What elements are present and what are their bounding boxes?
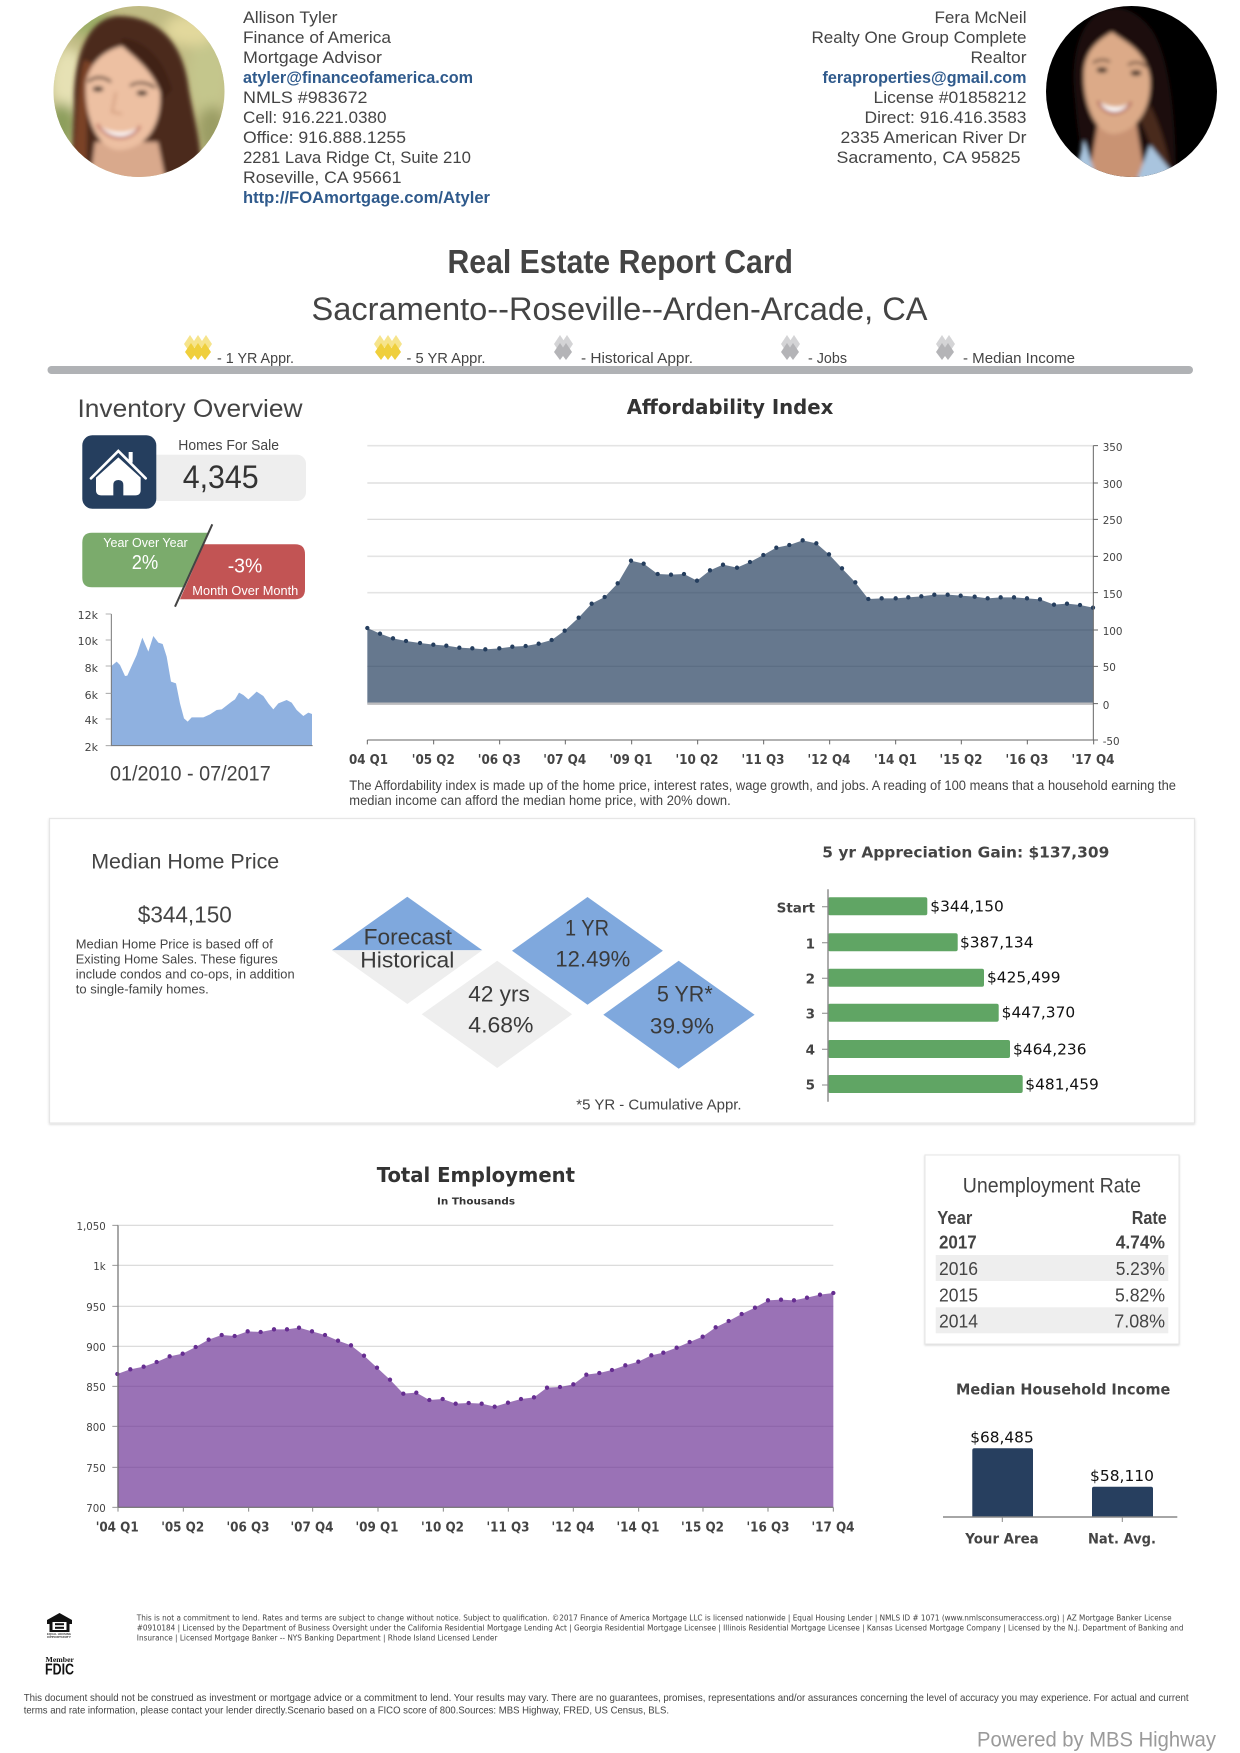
- x axis labels: '12 Q4: [552, 1521, 594, 1536]
- badge: month over month: -3%: [228, 556, 262, 578]
- panel: change badges: [82, 524, 305, 607]
- subtitle: metro area: Sacramento--Roseville--Arden-Arcade, CA: [312, 291, 928, 327]
- icon: member FDIC: [45, 1656, 74, 1678]
- badge: year over year: Year Over Year: [103, 535, 188, 550]
- contact block: Allison Tyler: Finance of America: [243, 28, 392, 47]
- chart: appreciation bars: Start: [777, 901, 816, 917]
- contact block: Fera McNeil: Direct: 916.416.3583: [864, 108, 1026, 127]
- diamond: 5 YR: 5 YR*: [657, 982, 713, 1007]
- chart: median household income: Nat. Avg.: [1088, 1531, 1156, 1547]
- text block: description: Median Home Price is based off of: [76, 936, 273, 951]
- label: Homes For Sale: [178, 437, 279, 454]
- diamond: 5 YR: 39.9%: [650, 1013, 714, 1038]
- icon: equal housing opportunity: OPPORTUNITY: [47, 1635, 71, 1639]
- x axis labels: '11 Q3: [486, 1521, 530, 1536]
- panel: median home price: [50, 818, 1194, 1123]
- y axis labels: 300: [1103, 479, 1123, 491]
- x axis labels: '06 Q3: [478, 753, 521, 768]
- x axis labels: 04 Q1: [349, 753, 388, 768]
- text block: description: include condos and co-ops, in addition: [76, 966, 295, 981]
- chart: appreciation bars: 1: [806, 936, 815, 952]
- contact block: Fera McNeil: Realtor: [970, 48, 1027, 67]
- legend label: 1 YR: - 1 YR Appr.: [217, 350, 294, 367]
- y axis labels: 800: [86, 1423, 106, 1434]
- y axis labels: [1103, 442, 1123, 748]
- credit: powered by: Powered by MBS Highway: [977, 1729, 1216, 1752]
- table: 5.82%: [1115, 1285, 1165, 1305]
- footnote: *5 YR - Cumulative Appr.: [576, 1096, 742, 1113]
- table: 2016: [939, 1259, 978, 1279]
- chart: appreciation bars: 3: [806, 1006, 815, 1022]
- x axis labels: '16 Q3: [746, 1521, 790, 1536]
- legend label: jobs: - Jobs: [808, 350, 847, 367]
- table: [936, 1208, 1168, 1333]
- text block: general disclaimer: [24, 1692, 1189, 1716]
- badge: year over year: 2%: [132, 552, 158, 574]
- diamond: forecast / historical key: [332, 897, 482, 1004]
- x axis labels: [349, 753, 1114, 768]
- y axis labels: 950: [86, 1303, 106, 1314]
- y axis labels: 850: [86, 1383, 106, 1394]
- icon: member FDIC: FDIC: [45, 1662, 74, 1678]
- diamond: 42 yrs: 4.68%: [468, 1013, 534, 1038]
- y axis labels: 1k: [93, 1262, 106, 1273]
- contact block: Fera McNeil: Realty One Group Complete: [812, 28, 1026, 47]
- contact block: Allison Tyler: http://FOAmortgage.com/Atyler: [243, 188, 490, 207]
- x axis labels: '05 Q2: [161, 1521, 204, 1536]
- panel: unemployment rate: [925, 1155, 1179, 1344]
- heading: affordability index: Affordability Index: [627, 395, 833, 419]
- heading: Median Home Price: [91, 849, 279, 873]
- table: 2014: [939, 1311, 978, 1331]
- text block: licensing disclaimer: [136, 1614, 1184, 1643]
- y axis labels: 100: [1103, 626, 1123, 638]
- chart: inventory area: [78, 609, 313, 754]
- chart: appreciation bars: [777, 889, 1099, 1102]
- x axis labels: '04 Q1: [96, 1521, 139, 1536]
- date range: 01/2010 - 07/2017: [110, 763, 271, 786]
- contact block: Allison Tyler: [243, 8, 490, 207]
- text block: licensing disclaimer: Insurance | Licensed Mortgage Banker -- NYS Banking Department | Rhode Island Licensed Lender: [137, 1634, 498, 1643]
- table: 5.23%: [1116, 1259, 1165, 1279]
- y axis labels: 700: [86, 1504, 106, 1515]
- table: Rate: [1132, 1208, 1167, 1228]
- y axis labels: 900: [86, 1343, 106, 1354]
- chart: median household income: [943, 1429, 1177, 1547]
- contact block: Fera McNeil: License #01858212: [874, 88, 1026, 107]
- table: 2017: [939, 1232, 977, 1252]
- chart: appreciation bars: $387,134: [960, 934, 1034, 952]
- icon: grey diamonds income: [936, 335, 955, 360]
- text block: description: [76, 936, 295, 996]
- heading: Unemployment Rate: [963, 1175, 1141, 1198]
- contact block: Fera McNeil: Fera McNeil: [934, 8, 1026, 27]
- x axis labels: '10 Q2: [421, 1521, 464, 1536]
- contact block: Allison Tyler: Office: 916.888.1255: [243, 128, 406, 147]
- chart: appreciation bars: $447,370: [1002, 1004, 1075, 1022]
- contact block: Fera McNeil: 2335 American River Dr: [840, 128, 1027, 147]
- x axis labels: '12 Q4: [808, 753, 850, 768]
- y axis labels: [77, 1222, 106, 1515]
- x axis labels: [96, 1521, 854, 1536]
- y axis labels: 10k: [78, 635, 99, 648]
- diamond: 42 yrs: [422, 961, 572, 1068]
- photo: Allison Tyler portrait: [54, 6, 224, 177]
- badge: year over year: [82, 533, 209, 587]
- heading: total employment: Total Employment: [377, 1163, 575, 1187]
- icon: gold diamonds 1 YR: [184, 335, 212, 360]
- icon: grey diamonds jobs: [781, 335, 800, 360]
- y axis labels: 150: [1103, 589, 1123, 601]
- icon: equal housing opportunity: EQUAL HOUSING: [47, 1632, 72, 1636]
- y axis labels: 8k: [85, 662, 99, 675]
- contact block: Allison Tyler: Mortgage Advisor: [243, 48, 382, 67]
- x axis labels: '06 Q3: [226, 1521, 270, 1536]
- chart: appreciation bars: 2: [806, 971, 815, 987]
- icon: equal housing opportunity: [47, 1613, 72, 1639]
- chart: appreciation bars: 5: [806, 1077, 815, 1093]
- diamond: forecast / historical key: Forecast: [364, 925, 452, 950]
- contact block: Fera McNeil: Sacramento, CA 95825: [836, 148, 1020, 167]
- diamond: 1 YR: 1 YR: [565, 916, 609, 941]
- chart: appreciation bars: $425,499: [987, 969, 1060, 987]
- title: Real Estate Report Card: [448, 243, 793, 280]
- y axis labels: -50: [1103, 736, 1120, 748]
- heading: median household income: Median Household Income: [956, 1380, 1170, 1398]
- y axis labels: 350: [1103, 442, 1123, 454]
- contact block: Allison Tyler: Allison Tyler: [243, 8, 338, 27]
- diamond: 1 YR: 12.49%: [555, 947, 630, 972]
- panel: homes for sale: [82, 435, 306, 509]
- contact block: Allison Tyler: atyler@financeofamerica.com: [243, 68, 473, 87]
- legend label: historical: - Historical Appr.: [581, 350, 693, 367]
- y axis labels: 4k: [85, 714, 99, 727]
- subheading: in thousands: In Thousands: [437, 1197, 515, 1208]
- x axis labels: '16 Q3: [1006, 753, 1048, 768]
- table: Year: [937, 1208, 972, 1228]
- contact block: Fera McNeil: [812, 8, 1027, 167]
- y axis labels: 0: [1103, 700, 1109, 712]
- chart: appreciation bars: $464,236: [1013, 1040, 1086, 1058]
- chart: appreciation bars: 4: [806, 1042, 815, 1058]
- chart: median household income: $68,485: [970, 1429, 1034, 1447]
- y axis labels: [78, 609, 99, 754]
- y axis labels: 50: [1103, 662, 1116, 674]
- heading: inventory overview: Inventory Overview: [78, 395, 303, 423]
- x axis labels: '14 Q1: [616, 1521, 660, 1536]
- y axis labels: 200: [1103, 552, 1123, 564]
- contact block: Allison Tyler: Roseville, CA 95661: [243, 168, 402, 187]
- heading: appreciation gain: 5 yr Appreciation Gain: $137,309: [822, 844, 1109, 862]
- x axis labels: '17 Q4: [812, 1521, 854, 1536]
- chart: median household income: $58,110: [1090, 1467, 1154, 1485]
- legend label: income: - Median Income: [963, 350, 1075, 367]
- diamond: 1 YR: [512, 897, 663, 1005]
- chart: affordability index: [349, 442, 1123, 768]
- icon: gold diamonds 5 YR: [374, 335, 402, 360]
- y axis labels: 12k: [78, 609, 99, 622]
- icon: member FDIC: Member: [46, 1656, 74, 1664]
- y axis labels: 6k: [85, 689, 99, 702]
- y axis labels: 750: [86, 1464, 106, 1475]
- contact block: Allison Tyler: Cell: 916.221.0380: [243, 108, 386, 127]
- contact block: Allison Tyler: NMLS #983672: [243, 88, 368, 107]
- x axis labels: '05 Q2: [412, 753, 455, 768]
- text block: affordability note: median income can afford the median home price, with 20% down.: [349, 793, 731, 808]
- text block: description: Existing Home Sales. These figures: [76, 951, 278, 966]
- text block: description: to single-family homes.: [76, 981, 209, 996]
- chart: median household income: Your Area: [964, 1531, 1039, 1547]
- table: 4.74%: [1116, 1232, 1165, 1252]
- legend: ratings row: [184, 335, 1075, 367]
- x axis labels: '17 Q4: [1072, 753, 1114, 768]
- x axis labels: '14 Q1: [874, 753, 917, 768]
- y axis labels: 250: [1103, 515, 1123, 527]
- text block: licensing disclaimer: This is not a commitment to lend. Rates and terms are subject to change without notice. Subject to qualification. ©2017 Finance of America Mortgage LLC is licensed nationwide | Equal Housing Lender | NMLS ID # 1071 (www.nmlsconsumeraccess.org) | AZ Mortgage Banker License: [136, 1614, 1172, 1623]
- chart: total employment: [77, 1222, 854, 1536]
- chart: appreciation bars: $481,459: [1025, 1075, 1099, 1093]
- table: 2015: [939, 1285, 978, 1305]
- value: 4,345: [183, 459, 259, 495]
- x axis labels: '11 Q3: [742, 753, 784, 768]
- diamond: forecast / historical key: Historical: [360, 947, 454, 972]
- x axis labels: '07 Q4: [290, 1521, 334, 1536]
- table: 7.08%: [1114, 1311, 1165, 1331]
- text block: affordability note: The Affordability index is made up of the home price, interest rates, wage growth, and jobs. A reading of 100 means that a household earning the: [349, 778, 1176, 793]
- badge: month over month: [180, 544, 305, 599]
- photo: Fera McNeil portrait: [1046, 6, 1217, 177]
- icon: house tile: [82, 435, 156, 509]
- icon: grey diamonds historical: [554, 335, 573, 360]
- y axis labels: 1,050: [77, 1222, 106, 1233]
- diamond: 42 yrs: 42 yrs: [468, 982, 530, 1007]
- y axis labels: 2k: [85, 741, 99, 754]
- x axis labels: '09 Q1: [610, 753, 652, 768]
- x axis labels: '09 Q1: [356, 1521, 398, 1536]
- text block: affordability note: [349, 778, 1176, 808]
- badge: month over month: Month Over Month: [192, 583, 298, 598]
- x axis labels: '15 Q2: [940, 753, 982, 768]
- contact block: Allison Tyler: 2281 Lava Ridge Ct, Suite 210: [243, 148, 471, 167]
- text block: general disclaimer: terms and rate information, please contact your lender directly.Scenario based on a FICO score of 800.Sources: MBS Highway, FRED, US Census, BLS.: [24, 1704, 669, 1716]
- value: $344,150: [138, 901, 232, 927]
- x axis labels: '07 Q4: [543, 753, 586, 768]
- chart: appreciation bars: $344,150: [930, 898, 1004, 916]
- legend label: 5 YR: - 5 YR Appr.: [406, 350, 486, 367]
- x axis labels: '10 Q2: [676, 753, 718, 768]
- x axis labels: '15 Q2: [681, 1521, 724, 1536]
- contact block: Fera McNeil: feraproperties@gmail.com: [822, 68, 1026, 87]
- diamond: 5 YR: [603, 961, 755, 1069]
